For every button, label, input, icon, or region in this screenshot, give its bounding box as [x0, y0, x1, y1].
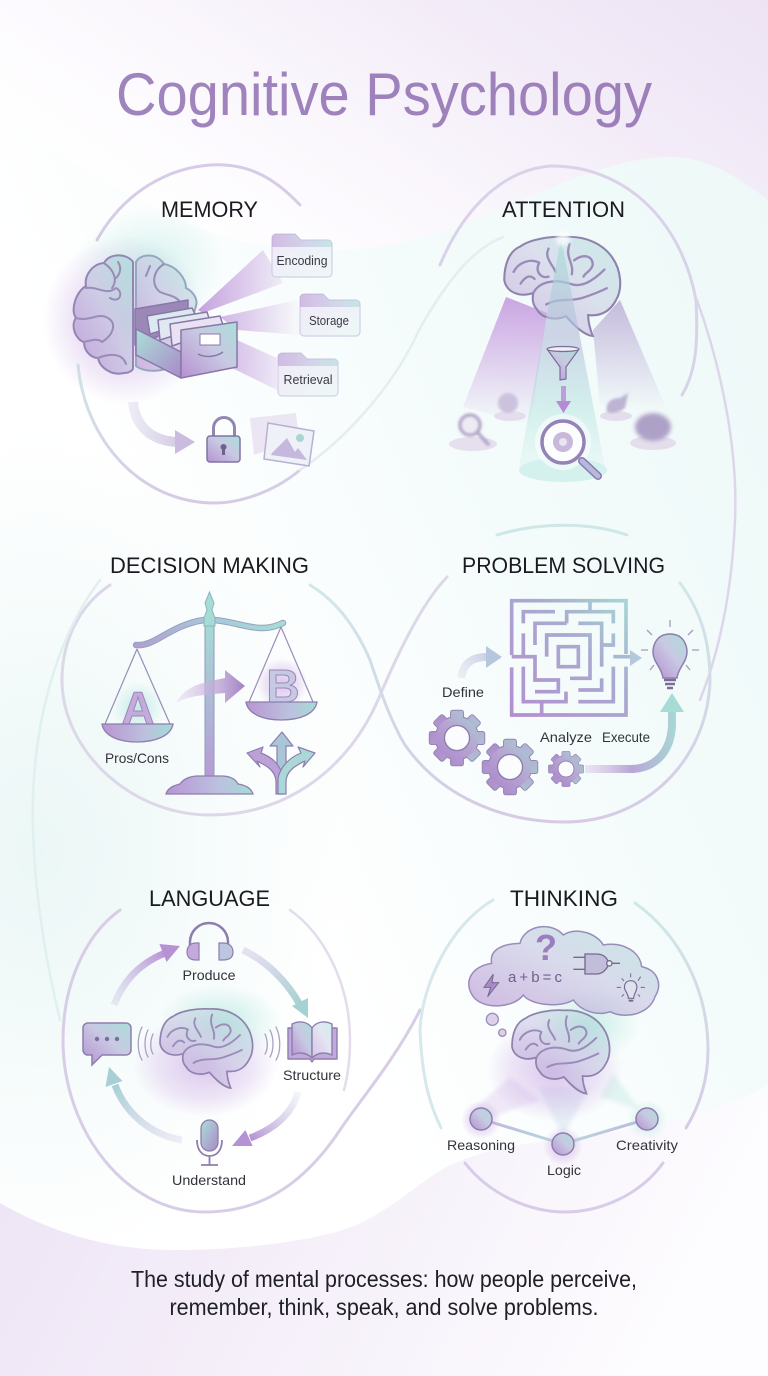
icon: balance scale: [105, 592, 313, 794]
arrow: maze to bulb: [630, 650, 642, 666]
network links: [481, 1119, 647, 1144]
icon: forked arrows: [247, 732, 315, 794]
arrow: a to b: [176, 670, 245, 703]
arrow: into maze: [461, 646, 502, 678]
panel: problem solving: [430, 553, 699, 794]
small distractors: [449, 393, 676, 451]
caption: [131, 1266, 637, 1320]
heading: decision making: DECISION MAKING: [110, 553, 309, 578]
icon: maze: [512, 601, 633, 715]
label: structure: Structure: [283, 1067, 341, 1083]
icon: funnel: [547, 346, 579, 380]
cycle arrows: [106, 944, 308, 1146]
label: analyze: Analyze: [540, 729, 592, 745]
label: understand: Understand: [172, 1172, 246, 1188]
heading: problem solving: PROBLEM SOLVING: [462, 553, 665, 578]
icon: photos: [250, 413, 314, 466]
network nodes: [470, 1108, 658, 1155]
heading: language: LANGUAGE: [149, 886, 270, 911]
connecting curves and panel rings: [33, 165, 735, 1212]
folder: retrieval: Retrieval: [284, 373, 332, 387]
icon: thought cloud: [469, 927, 659, 1036]
label: produce: Produce: [182, 967, 236, 983]
memory brain glow: [43, 207, 225, 405]
letter B: B: [266, 660, 300, 712]
arrow: execute to bulb: [585, 693, 684, 769]
thinking brain glow: [487, 987, 640, 1122]
letter glows: [112, 658, 308, 734]
panel: attention: [449, 197, 676, 482]
heading: memory: MEMORY: [161, 197, 258, 222]
icon: padlock: [207, 418, 240, 462]
light beams: [463, 297, 667, 425]
label: execute: Execute: [602, 729, 650, 745]
heading: attention: ATTENTION: [502, 197, 625, 222]
caption: The study of mental processes: how people perceive,: [131, 1266, 637, 1292]
folder: storage: [300, 294, 360, 336]
icon: focus magnifier: [519, 414, 607, 482]
label: reasoning: Reasoning: [447, 1137, 515, 1153]
folder: encoding: [272, 234, 332, 277]
arrow: to storage: [133, 402, 195, 454]
question mark: ?: [535, 927, 557, 968]
sound waves: [138, 1027, 280, 1060]
label: logic: Logic: [547, 1162, 581, 1178]
node glows: [461, 1100, 667, 1166]
heading: thinking: THINKING: [510, 886, 618, 911]
icon: top view brain: [74, 255, 197, 374]
arrow: focus: [556, 386, 571, 413]
rays to nodes: [470, 1073, 640, 1137]
label: pros/cons: Pros/Cons: [105, 750, 169, 766]
pans: [102, 702, 317, 742]
icon: brain: [160, 1009, 253, 1088]
panel: thinking: [447, 886, 678, 1178]
label: creativity: Creativity: [616, 1137, 678, 1153]
icon: speech bubble: [83, 1023, 131, 1065]
title: Cognitive Psychology: [116, 61, 652, 128]
highlight: [556, 232, 570, 246]
gears: [430, 711, 583, 794]
icon: headphones: [187, 923, 233, 960]
language brain glow: [133, 984, 282, 1117]
icon: brain: [504, 237, 620, 336]
panel: memory: [43, 197, 360, 466]
folder: retrieval: [278, 353, 338, 396]
rays to folders: [198, 250, 300, 390]
folder: encoding: Encoding: [276, 254, 328, 268]
equation: a + b = c: [508, 969, 562, 986]
icon: file cabinet: [135, 300, 237, 378]
icon: light bulb: [641, 620, 699, 688]
icon: microphone: [197, 1120, 222, 1165]
icon: brain: [512, 1010, 610, 1094]
focus beam: [519, 238, 605, 467]
icon: open book: [288, 1022, 337, 1062]
folder: storage: Storage: [309, 314, 349, 328]
caption: remember, think, speak, and solve problems.: [170, 1294, 598, 1320]
label: define: Define: [442, 684, 484, 700]
panel: decision making: [102, 553, 317, 794]
panel: language: [83, 886, 341, 1188]
letter A: A: [121, 682, 155, 734]
